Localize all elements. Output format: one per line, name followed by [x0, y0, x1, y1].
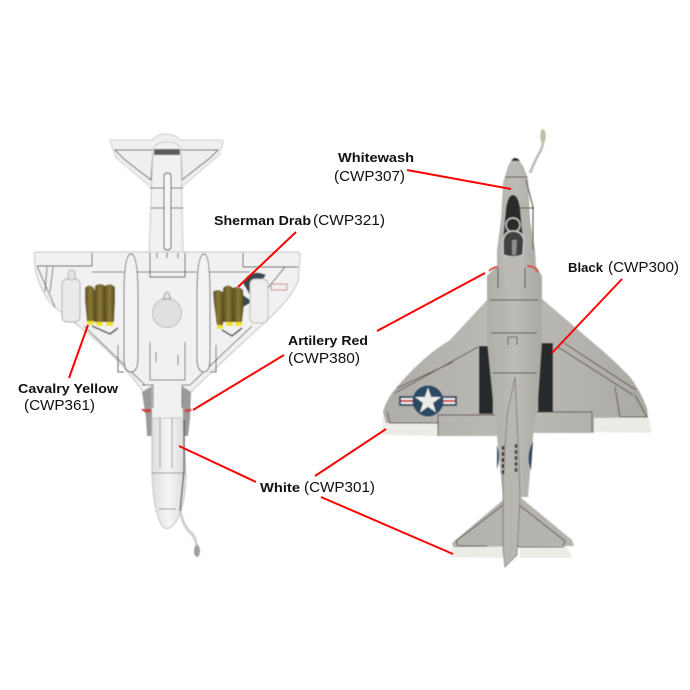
label: Whitewash	[334, 150, 414, 185]
label: Black: (CWP300)	[608, 259, 679, 276]
nose section	[152, 418, 186, 528]
label: Cavalry Yellow: (CWP361)	[24, 397, 95, 414]
centre recess	[152, 298, 182, 328]
canopy	[503, 218, 524, 257]
leader lines	[69, 170, 622, 554]
label: Artilery Red: (CWP380)	[288, 350, 360, 367]
aircraft: top view	[381, 129, 652, 567]
national insignia	[399, 386, 457, 416]
white tailplane tips	[450, 544, 573, 558]
label: Artilery Red	[288, 333, 368, 367]
anti-glare panel	[503, 195, 523, 240]
rear fuselage	[149, 142, 183, 254]
nose cone tip	[511, 158, 520, 161]
white wingtips	[381, 408, 652, 436]
label: Black: Black	[568, 260, 604, 275]
label: Black	[568, 259, 679, 276]
label: Sherman Drab	[214, 212, 385, 229]
tailplane	[110, 134, 223, 188]
bombs right: Sherman Drab	[213, 286, 244, 329]
label: Cavalry Yellow	[18, 381, 119, 414]
red intake edge	[489, 266, 538, 272]
fuselage	[487, 159, 542, 497]
wings and centre body	[34, 252, 300, 422]
black wing panels	[479, 346, 493, 414]
bombs left: Cavalry Yellow tips	[85, 284, 115, 326]
horizontal tail	[452, 497, 574, 547]
insignia under tail	[497, 441, 533, 470]
label: White: White	[260, 480, 300, 495]
label: White: (CWP301)	[304, 479, 375, 496]
engine exhaust stubs	[142, 386, 191, 436]
label: Artilery Red: Artilery Red	[288, 333, 368, 348]
NAVY marks	[503, 444, 516, 474]
refuelling probe	[530, 129, 546, 173]
wings	[383, 298, 648, 436]
spine behind canopy	[502, 256, 525, 292]
vertical fin	[503, 377, 520, 567]
label: Sherman Drab: (CWP321)	[313, 212, 385, 229]
left fuel tank	[62, 270, 80, 322]
right fuel tank	[243, 273, 287, 323]
label: Whitewash: (CWP307)	[334, 168, 405, 185]
wing stores and pods	[124, 254, 210, 372]
refuelling probe	[180, 511, 200, 557]
label: Sherman Drab: Sherman Drab	[214, 213, 311, 228]
aircraft: underside view	[34, 134, 300, 557]
label: Cavalry Yellow: Cavalry Yellow	[18, 381, 119, 396]
label: Whitewash: Whitewash	[338, 150, 414, 165]
pylons under bombs	[92, 326, 242, 336]
label: White	[260, 479, 375, 496]
